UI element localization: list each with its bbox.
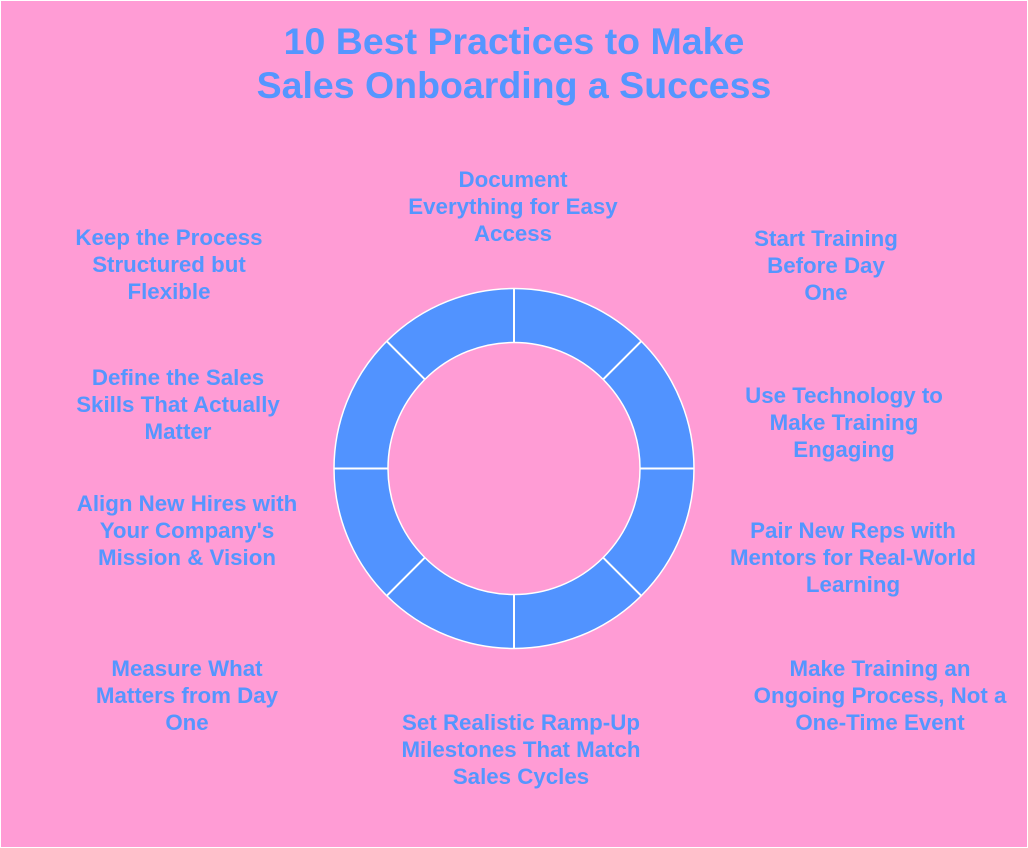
label: ramp-up milestones: [401, 710, 641, 789]
label: align new hires: Mission & Vision: [98, 545, 276, 570]
label: use technology: Use Technology to: [745, 383, 943, 408]
label: keep process structured: Flexible: [127, 279, 211, 304]
label: ramp-up milestones: Sales Cycles: [453, 764, 589, 789]
label: define skills: Matter: [145, 419, 211, 444]
label: measure: Matters from Day: [96, 683, 278, 708]
label: ongoing process: [754, 656, 1007, 735]
label: ongoing process: Make Training an: [790, 656, 970, 681]
label: pair new reps: Mentors for Real-World: [730, 545, 976, 570]
label: define skills: [76, 365, 280, 444]
label: measure: One: [165, 710, 209, 735]
label: start training: Before Day: [767, 253, 885, 278]
label: document everything: Everything for Easy: [408, 194, 618, 219]
label: define skills: Define the Sales: [92, 365, 264, 390]
label: measure: [96, 656, 278, 735]
label: use technology: [745, 383, 943, 462]
title: 10 Best Practices to Make: [284, 20, 744, 62]
label: document everything: Document: [458, 167, 568, 192]
title: Sales Onboarding a Success: [257, 64, 771, 106]
label: ongoing process: One-Time Event: [795, 710, 965, 735]
label: ongoing process: Ongoing Process, Not a: [754, 683, 1006, 708]
label: measure: Measure What: [111, 656, 263, 681]
label: start training: One: [804, 280, 848, 305]
label: keep process structured: Keep the Process: [75, 225, 263, 250]
title: [257, 20, 771, 106]
label: align new hires: Your Company's: [100, 518, 274, 543]
label: pair new reps: Learning: [806, 572, 900, 597]
label: use technology: Make Training: [770, 410, 918, 435]
label: use technology: Engaging: [793, 437, 895, 462]
label: start training: Start Training: [754, 226, 898, 251]
label: pair new reps: Pair New Reps with: [750, 518, 956, 543]
label: document everything: Access: [474, 221, 552, 246]
label: align new hires: [77, 491, 297, 570]
label: align new hires: Align New Hires with: [77, 491, 297, 516]
label: keep process structured: [75, 225, 263, 304]
label: ramp-up milestones: Set Realistic Ramp-Up: [402, 710, 640, 735]
label: start training: [754, 226, 898, 305]
label: pair new reps: [730, 518, 976, 597]
label: document everything: [408, 167, 618, 246]
label: keep process structured: Structured but: [92, 252, 246, 277]
label: define skills: Skills That Actually: [76, 392, 280, 417]
label: ramp-up milestones: Milestones That Match: [401, 737, 641, 762]
